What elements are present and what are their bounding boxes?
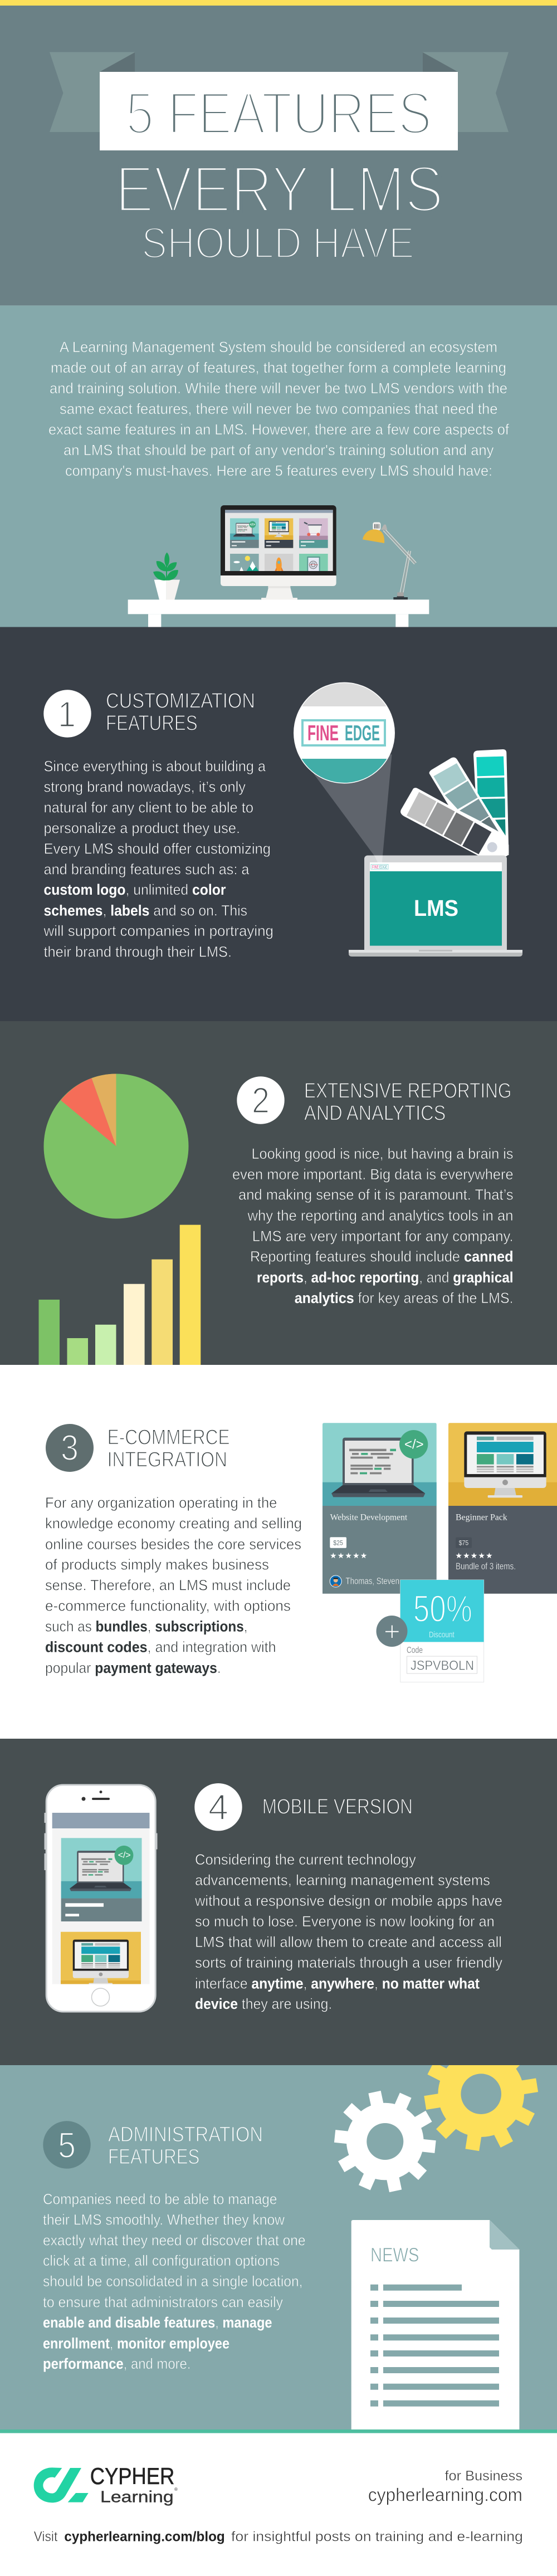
panel: introduction: [0, 305, 557, 627]
body text: even more important. Big data is everywhere: [232, 1166, 514, 1183]
body text: exactly what they need or discover that one: [43, 2232, 305, 2249]
heading: administration features: FEATURES: [108, 2145, 199, 2169]
logo: Cypher Learning: Learning: [100, 2489, 174, 2506]
intro text: company's must-haves. Here are 5 features every LMS should have:: [65, 462, 492, 479]
heading: extensive reporting and analytics: AND ANALYTICS: [304, 1101, 446, 1125]
discount coupon: Code: [407, 1646, 423, 1655]
rating stars: [330, 1553, 367, 1558]
blog call to action: cypherlearning.com/blog: [64, 2529, 225, 2545]
heading: customization features: CUSTOMIZATION: [106, 689, 255, 713]
intro text: exact same features in an LMS. However, there are a few core aspects of: [48, 421, 509, 438]
number badge 3: [46, 1424, 94, 1472]
course card: website development: Website Development: [330, 1513, 408, 1523]
logo mark: [34, 2467, 89, 2502]
body text: knowledge economy creating and selling: [45, 1515, 302, 1532]
intro text: and training solution. While there will never be two LMS vendors with the: [50, 380, 507, 397]
body text: Looking good is nice, but having a brain is: [252, 1145, 514, 1162]
heading: administration features: [108, 2123, 263, 2169]
icon: monitor: </>: [250, 523, 255, 527]
body text: schemes, labels and so on. This: [43, 902, 247, 919]
number badge 2: [237, 1076, 285, 1124]
icon: news document: [351, 2220, 519, 2429]
body text: personalize a product they use.: [43, 820, 240, 837]
icon: laptop: [349, 856, 522, 957]
logo: Cypher Learning: ®: [174, 2487, 178, 2492]
body text: popular payment gateways.: [45, 1660, 221, 1676]
intro text: an LMS that should be part of any vendor's training solution and any: [63, 442, 494, 458]
bar chart: [39, 1225, 201, 1365]
number badge 3: 3: [61, 1427, 79, 1468]
body text: to ensure that administrators can easily: [43, 2294, 283, 2310]
body text: device they are using.: [195, 1996, 332, 2012]
body text: such as bundles, subscriptions,: [45, 1618, 247, 1635]
body text: [43, 758, 273, 960]
number badge 5: [43, 2121, 91, 2169]
desk illustration: [128, 505, 429, 627]
body text: analytics for key areas of the LMS.: [295, 1290, 514, 1306]
mobile course card 1: </>: [118, 1851, 131, 1860]
icon: white gear: [334, 2091, 436, 2192]
blog call to action: for insightful posts on training and e-learning: [231, 2529, 523, 2545]
body text: custom logo, unlimited color: [43, 881, 226, 898]
mini logo: EDGE: [379, 865, 387, 870]
title: should have: SHOULD HAVE: [141, 218, 414, 267]
body text: Every LMS should offer customizing: [43, 840, 271, 857]
heading: administration features: ADMINISTRATION: [108, 2123, 263, 2146]
icon: desk lamp: [363, 522, 416, 600]
mobile course card 1: [61, 1838, 141, 1921]
body text: enable and disable features, manage: [43, 2314, 272, 2331]
intro text: [48, 339, 509, 479]
icon: avatar: [330, 1575, 341, 1587]
icon: desk: [128, 599, 429, 627]
body text: [43, 2190, 305, 2372]
course card: beginner pack: [448, 1423, 557, 1594]
icon: magnifier beam: [312, 754, 392, 856]
body text: LMS are very important for any company.: [252, 1228, 514, 1245]
body text: LMS that will allow them to create and access all: [195, 1934, 502, 1950]
body text: performance, and more.: [43, 2355, 190, 2372]
body text: click at a time, all configuration options: [43, 2252, 280, 2269]
code input: JSPVBOLN: [411, 1658, 474, 1674]
body text: of products simply makes business: [45, 1557, 269, 1573]
icon: magnified logo: FINE: [307, 721, 339, 745]
panel: feature 1 customization: [0, 627, 557, 1021]
body text: interface anytime, anywhere, no matter what: [195, 1975, 480, 1992]
heading: customization features: FEATURES: [106, 711, 198, 735]
discount coupon: [400, 1580, 484, 1682]
number badge 1: 1: [58, 694, 76, 735]
top accent bar: [0, 0, 557, 6]
mini logo: FINE: [372, 865, 379, 870]
heading: extensive reporting and analytics: [304, 1079, 511, 1125]
body text: Considering the current technology: [195, 1851, 416, 1868]
number badge 5: 5: [58, 2125, 76, 2165]
icon: monitor: [221, 505, 336, 600]
body text: Reporting features should include canned: [250, 1248, 514, 1265]
body text: why the reporting and analytics tools in an: [247, 1207, 514, 1224]
price badge: [456, 1538, 472, 1548]
intro text: A Learning Management System should be considered an ecosystem: [60, 339, 497, 355]
body text: natural for any client to be able to: [43, 799, 253, 816]
number badge 4: 4: [208, 1787, 228, 1827]
body text: advancements, learning management systems: [195, 1872, 490, 1889]
body text: should be consolidated in a single location,: [43, 2273, 302, 2290]
panel: feature 2 reporting: [0, 1021, 557, 1365]
blog call to action: [34, 2529, 523, 2545]
price badge: [330, 1537, 346, 1548]
body text: online courses besides the core services: [45, 1536, 301, 1553]
title: 5 features: 5 FEATURES: [126, 80, 432, 147]
icon: yellow gear: [424, 2065, 538, 2151]
body text: reports, ad-hoc reporting, and graphical: [257, 1269, 514, 1286]
logo: Cypher Learning: [34, 2463, 178, 2506]
body text: so much to lose. Everyone is now looking for an: [195, 1913, 495, 1930]
icon: laptop with code: [331, 1430, 428, 1497]
body text: their brand through their LMS.: [43, 943, 232, 960]
discount coupon: Discount: [429, 1630, 455, 1640]
icon: plus button: [377, 1616, 408, 1647]
website: cypherlearning.com: [368, 2485, 522, 2505]
heading: e-commerce integration: INTEGRATION: [108, 1448, 227, 1472]
panel: header: [0, 6, 557, 305]
number badge 4: [194, 1783, 242, 1831]
price badge: $25: [333, 1539, 343, 1546]
body text: Since everything is about building a: [43, 758, 266, 774]
body text: [232, 1145, 514, 1306]
panel: feature 3 e-commerce: [0, 1365, 557, 1739]
course card: beginner pack: Beginner Pack: [456, 1513, 507, 1523]
panel: feature 5 administration: [0, 2037, 557, 2429]
intro text: made out of an array of features, that together form a complete learning: [51, 359, 506, 376]
body text: will support companies in portraying: [43, 923, 273, 939]
body text: [45, 1495, 302, 1676]
course card: beginner pack: Bundle of 3 items.: [456, 1562, 516, 1572]
panel: footer: [0, 2433, 557, 2576]
body text: their LMS smoothly. Whether they know: [43, 2212, 285, 2228]
number badge 1: [43, 690, 91, 738]
body text: and branding features such as: a: [43, 861, 250, 878]
body text: and making sense of it is paramount. That’s: [238, 1187, 514, 1203]
intro text: same exact features, there will never be two companies that need the: [60, 401, 498, 417]
mini logo: [371, 865, 388, 870]
body text: sense. Therefore, an LMS must include: [45, 1577, 291, 1594]
heading: e-commerce integration: [108, 1426, 230, 1472]
course card: website development: </>: [404, 1437, 424, 1452]
heading: e-commerce integration: E-COMMERCE: [108, 1426, 230, 1450]
icon: magnified logo: EDGE: [345, 721, 380, 745]
course card: website development: Thomas, Steven: [345, 1577, 399, 1587]
icon: potted plant: [153, 553, 180, 600]
icon: laptop: LMS: [414, 895, 458, 921]
title: every LMS: EVERY LMS: [115, 153, 443, 226]
price badge: $75: [459, 1539, 468, 1546]
ribbon banner: [50, 52, 509, 150]
logo: Cypher Learning: CYPHER: [90, 2463, 174, 2489]
discount coupon: 50%: [413, 1588, 472, 1630]
body text: e-commerce functionality, with options: [45, 1598, 291, 1614]
brand tagline: for Business: [444, 2468, 522, 2484]
body text: sorts of training materials through a user friendly: [195, 1954, 502, 1971]
number badge 2: 2: [252, 1080, 270, 1121]
body text: without a responsive design or mobile apps have: [194, 1892, 502, 1909]
icon: monitor: [464, 1431, 546, 1497]
heading: extensive reporting and analytics: EXTENSIVE REPORTING: [304, 1079, 511, 1102]
body text: Companies need to be able to manage: [43, 2190, 277, 2207]
icon: news document: NEWS: [370, 2244, 419, 2266]
body text: discount codes, and integration with: [45, 1639, 276, 1656]
body text: strong brand nowadays, it’s only: [43, 779, 246, 796]
rating stars: [456, 1553, 492, 1558]
course card: website development: [323, 1423, 437, 1594]
icon: magnified logo: [290, 682, 401, 784]
heading: mobile version: MOBILE VERSION: [262, 1795, 413, 1819]
panel: feature 4 mobile: [0, 1739, 557, 2065]
body text: enrollment, monitor employee: [43, 2335, 229, 2352]
pie chart: [43, 1074, 188, 1219]
body text: [194, 1851, 502, 2012]
home button: [91, 1988, 109, 2006]
footer accent strip: [0, 2429, 557, 2433]
blog call to action: Visit: [34, 2529, 57, 2545]
icon: smartphone: [45, 1785, 157, 2012]
heading: customization features: [106, 689, 255, 735]
icon: color swatch fan: [400, 749, 509, 857]
body text: For any organization operating in the: [45, 1495, 277, 1511]
mobile course card 2: [61, 1932, 141, 1985]
